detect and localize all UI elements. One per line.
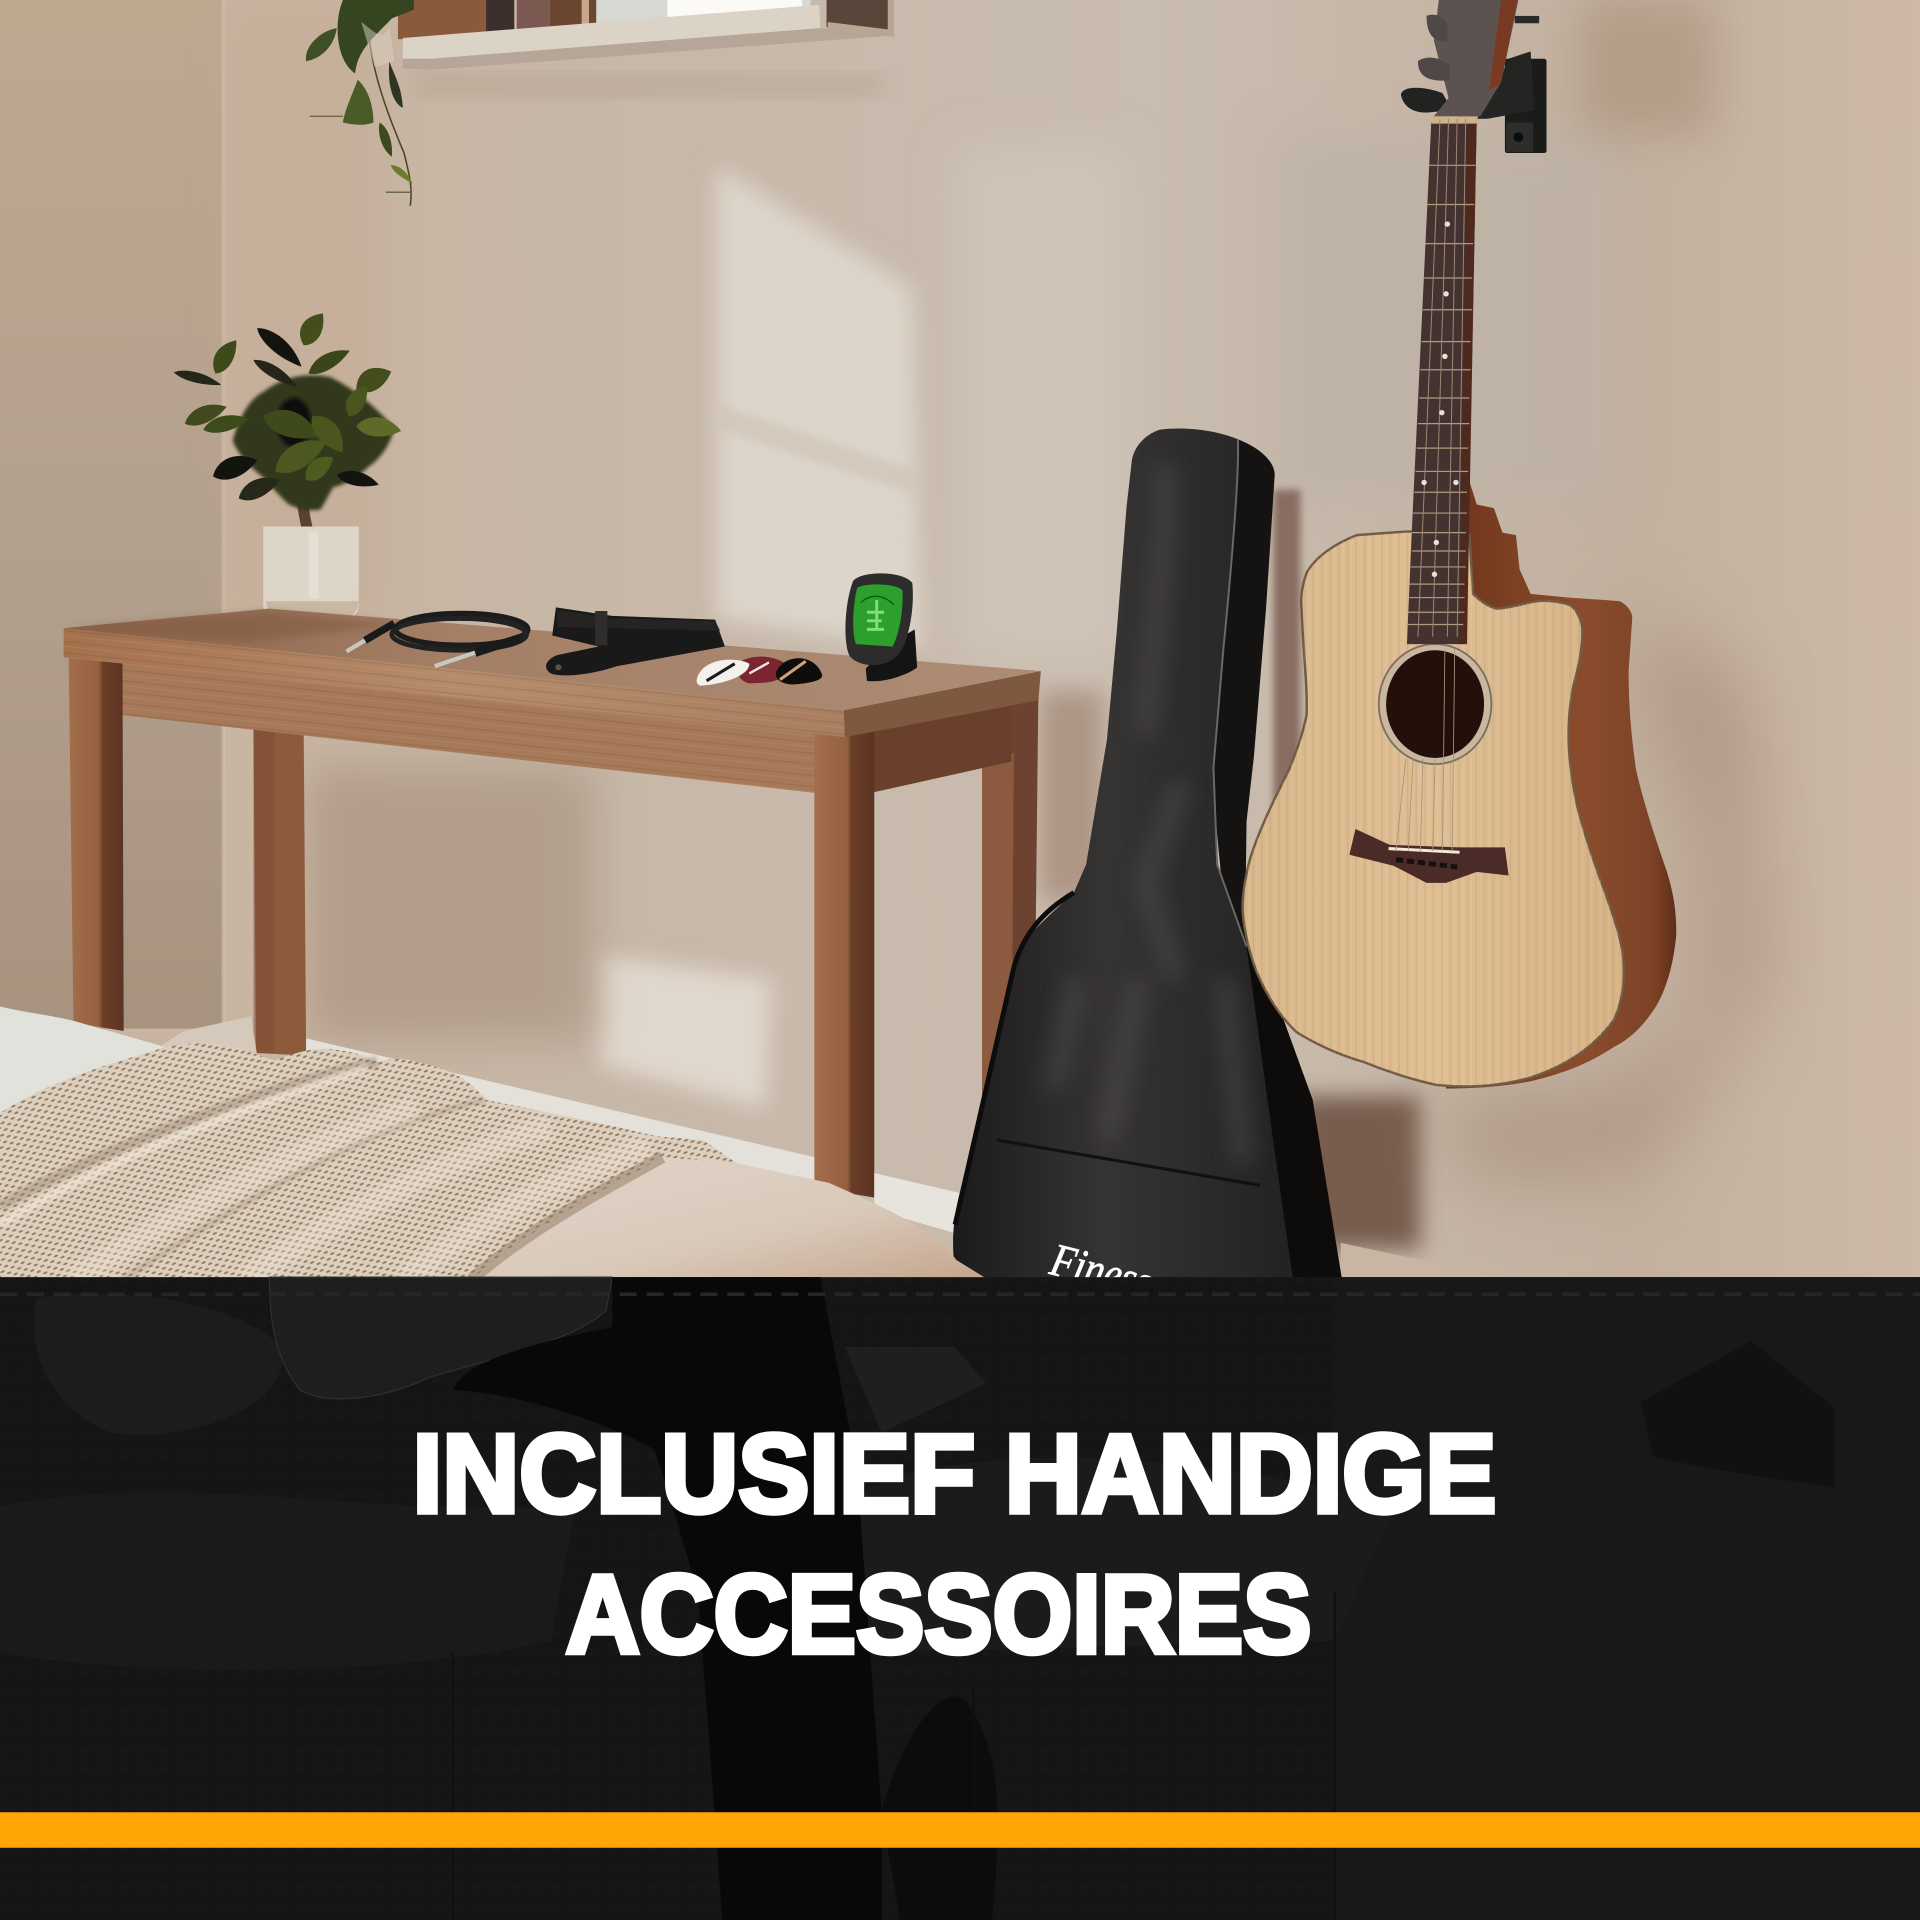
hanging plant [306,0,414,206]
orange accent bar [0,1812,1920,1848]
strings over the body [1396,649,1455,851]
title: INCLUSIEF HANDIGE [413,1411,1496,1536]
title: ACCESSOIRES [566,1552,1311,1677]
accessory: guitar picks [697,657,822,686]
bed with sheet and knitted blanket [0,1007,988,1280]
guitar on wall hanger [1243,0,1676,1089]
guitar gig bag [953,429,1342,1313]
bridge [1349,829,1509,883]
guitar top [1243,531,1624,1087]
wall hanger [1401,51,1547,153]
headstock [1418,0,1539,116]
accessory: clip-on tuner [845,573,917,681]
baseboard [159,1016,1500,1277]
accessory: guitar cable [347,613,528,666]
dark bottom band with faded photo [0,1277,1920,1920]
accessory: guitar strap [546,607,725,675]
neck and fretboard [1407,116,1478,644]
wall background [0,0,1920,1280]
bag logo: Finesse [1045,1234,1174,1313]
sound hole [1379,644,1491,764]
title [413,1411,1496,1677]
wall shelf with objects [398,0,894,96]
guitar side [1446,481,1676,1089]
desk [64,609,1041,1198]
wall shadows by bag and guitar [1273,490,1763,1249]
potted plant [173,307,402,623]
